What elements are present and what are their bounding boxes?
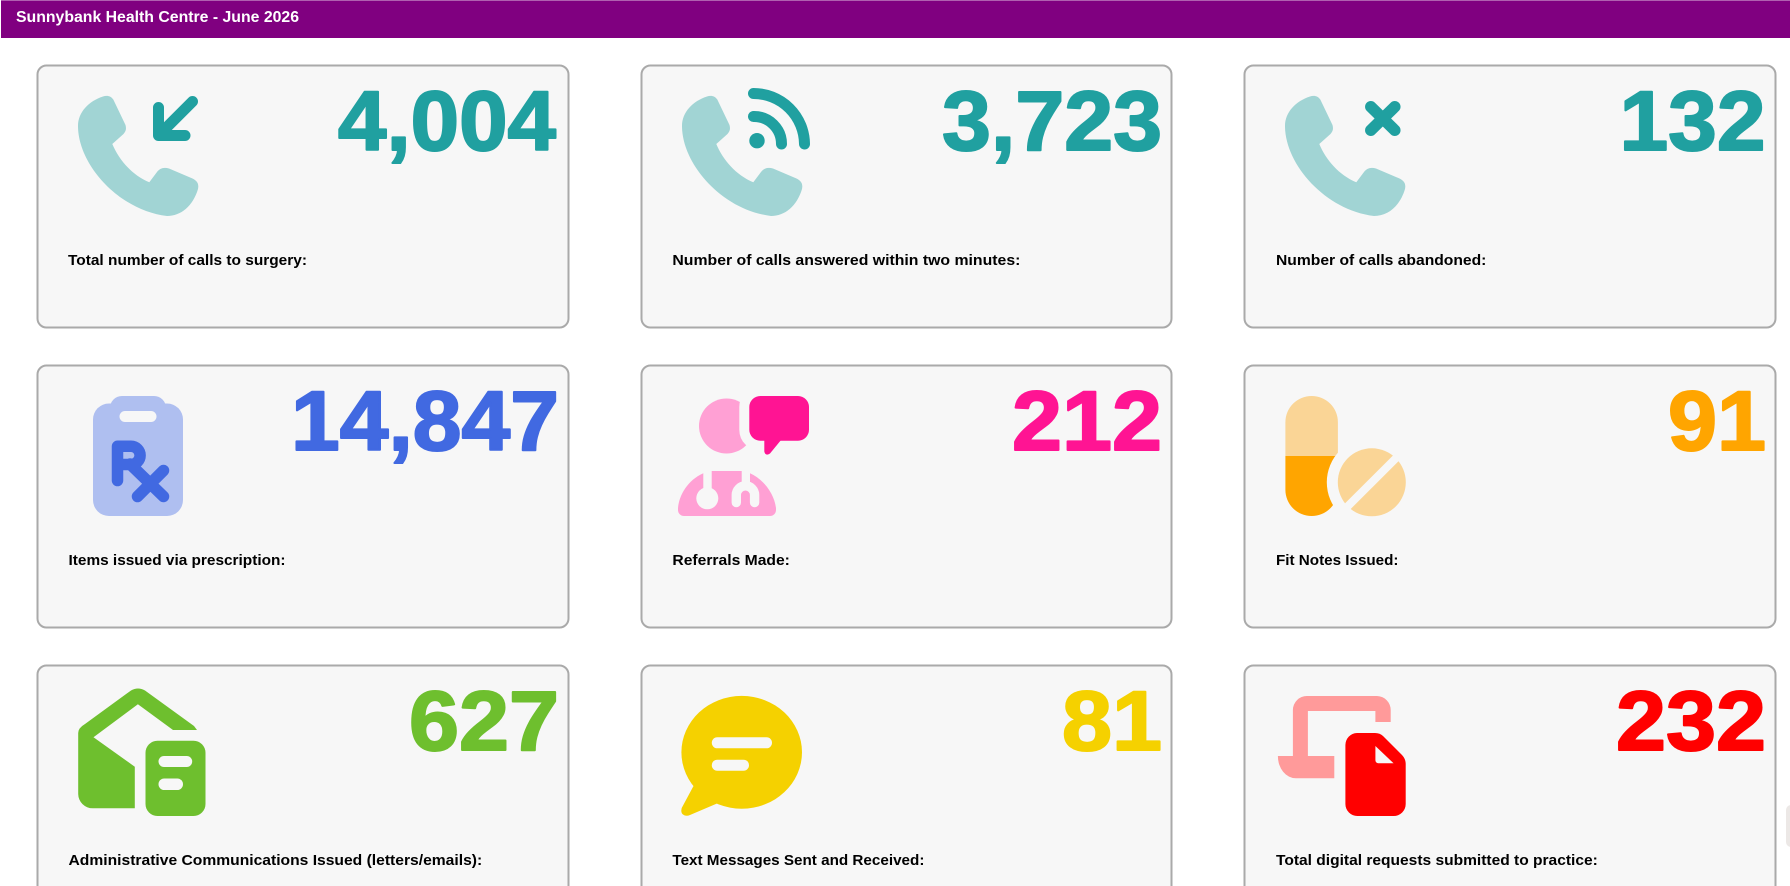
icon: chat bubble [681, 696, 802, 816]
panel: referrals [642, 366, 1172, 628]
label: Number of calls answered within two minutes: [672, 252, 1020, 269]
panel: digital requests [1244, 666, 1776, 886]
icon: device and document [1278, 696, 1406, 816]
panel: administrative communications [38, 666, 568, 886]
value: 627: 627 [409, 674, 559, 768]
panel: calls answered [642, 66, 1172, 328]
label: Items issued via prescription: [68, 552, 286, 569]
value: 4,004: 4,004 [338, 74, 556, 168]
value: 3,723: 3,723 [942, 74, 1162, 168]
icon: prescription clipboard [93, 396, 183, 516]
icon: phone with cross [1285, 96, 1405, 216]
panel: calls abandoned [1244, 66, 1776, 328]
icon: doctor with speech bubble [678, 396, 809, 516]
panel: text messages [642, 666, 1172, 886]
value: 91: 91 [1668, 374, 1766, 468]
panel: prescription items [38, 366, 568, 628]
value: 232: 232 [1616, 674, 1766, 768]
label: Total digital requests submitted to practice: [1276, 852, 1598, 869]
value: 81: 81 [1062, 674, 1162, 768]
value: 212: 212 [1012, 374, 1162, 468]
label: Fit Notes Issued: [1276, 552, 1398, 569]
label: Number of calls abandoned: [1276, 252, 1486, 269]
label: Text Messages Sent and Received: [672, 852, 924, 869]
label: Total number of calls to surgery: [68, 252, 307, 269]
title: Sunnybank Health Centre - June 2026 [16, 9, 299, 26]
value: 132: 132 [1620, 74, 1766, 168]
icon: phone with incoming arrow [78, 96, 198, 216]
label: Referrals Made: [672, 552, 790, 569]
panel: total calls [38, 66, 568, 328]
panel: fit notes [1244, 366, 1776, 628]
icon: capsule and tablet [1285, 396, 1417, 527]
icon: envelope and document [78, 688, 206, 816]
scroll handle [1786, 805, 1790, 847]
header bar [1, 0, 1790, 38]
icon: phone with signal [682, 94, 804, 216]
label: Administrative Communications Issued (letters/emails): [68, 852, 482, 869]
value: 14,847: 14,847 [291, 374, 559, 468]
